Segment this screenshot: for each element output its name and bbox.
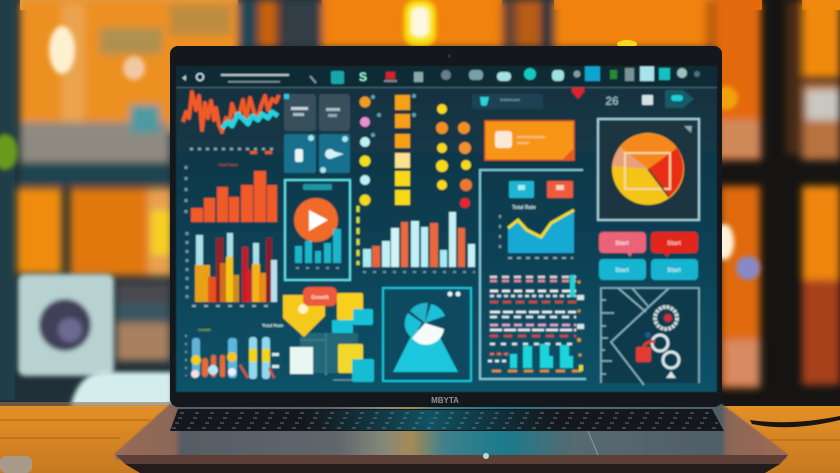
line chart xyxy=(183,92,279,154)
laptop lid bezel xyxy=(170,46,722,407)
four status buttons: Start xyxy=(667,241,681,247)
keyboard xyxy=(170,409,724,431)
toggle tag xyxy=(665,90,694,108)
trackpad divider and notch xyxy=(588,431,598,455)
top info pill: Dashboard xyxy=(500,97,520,102)
white chair xyxy=(70,372,172,408)
small multi-colour chart: Growth xyxy=(198,327,211,332)
laptop base xyxy=(114,404,788,473)
four status buttons: Start xyxy=(615,241,629,247)
top toolbar xyxy=(182,66,700,84)
grouped bar chart xyxy=(358,206,475,272)
video panel xyxy=(285,180,350,280)
wooden table xyxy=(0,402,840,473)
pendant lamps xyxy=(0,0,760,280)
date number: 26 xyxy=(605,94,619,108)
screen xyxy=(176,66,717,392)
small multi-colour chart xyxy=(186,323,284,379)
large dashboard panel frame xyxy=(480,170,586,380)
camera xyxy=(448,54,450,58)
pie chart panel xyxy=(598,119,699,220)
pie pyramid panel xyxy=(383,288,471,381)
folder icon xyxy=(642,95,653,105)
white appliance xyxy=(18,274,114,376)
power light xyxy=(483,453,489,459)
flow diagram: Growth xyxy=(311,295,329,301)
buttons and area chart xyxy=(500,181,574,258)
small multi-colour chart: Total Rate xyxy=(262,323,284,328)
four status buttons xyxy=(599,232,698,280)
top info pill xyxy=(472,94,543,109)
buttons and area chart: Total Rate xyxy=(512,205,536,211)
heart icon xyxy=(572,87,584,99)
app tiles xyxy=(284,94,350,173)
table side markers xyxy=(577,280,584,371)
orange callout card xyxy=(485,121,574,160)
dense data table xyxy=(488,277,586,371)
flow diagram xyxy=(283,287,374,382)
table mini bars xyxy=(510,275,575,368)
top toolbar: Dashboard xyxy=(250,75,260,77)
four status buttons: Start xyxy=(615,268,629,274)
stacked colour bar chart xyxy=(187,232,277,306)
gear network panel xyxy=(601,288,700,385)
status dots and squares xyxy=(360,94,472,208)
brand logo: MBYTA xyxy=(431,396,459,405)
top toolbar: S xyxy=(359,70,367,84)
orange bar chart: Total Sales xyxy=(218,162,238,167)
orange bar chart xyxy=(186,162,277,222)
four status buttons: Start xyxy=(667,268,681,274)
